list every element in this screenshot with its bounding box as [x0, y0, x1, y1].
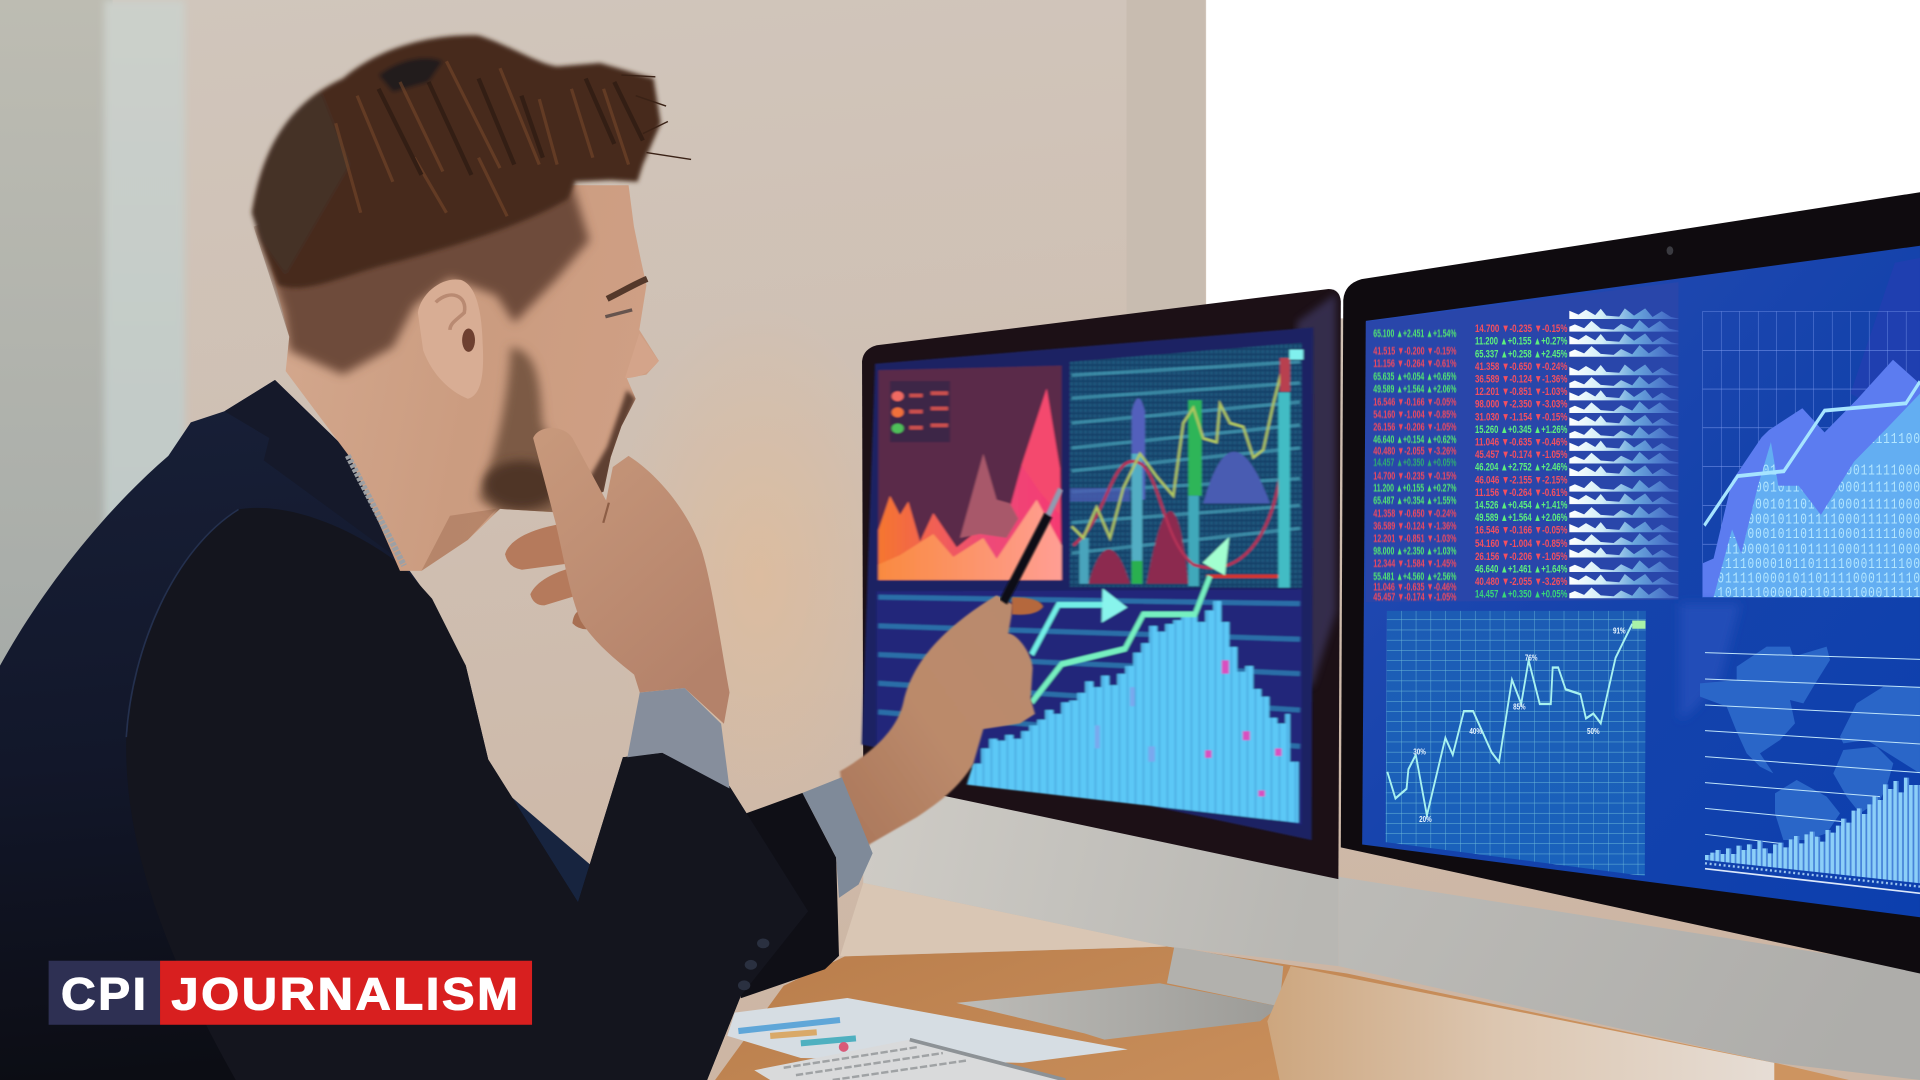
sparkline column — [1569, 308, 1678, 598]
binary digits in chart: 1111000010110111100011111000 — [1710, 526, 1920, 543]
nose shade — [628, 366, 654, 378]
binary digits in chart: 1111000010110111100011111000 — [1710, 496, 1920, 513]
near shirt cuff — [627, 688, 730, 788]
head and neck — [252, 35, 691, 571]
data table column one: 26.156 ▼-0.206 ▼-1.05% — [1373, 421, 1457, 434]
hand on chin — [505, 428, 730, 724]
arrow: cyan trend — [1032, 588, 1127, 655]
paper and keyboard on desk — [727, 998, 1128, 1080]
data table column one: 36.589 ▼-0.124 ▼-1.36% — [1373, 520, 1457, 533]
hair spikes — [621, 75, 691, 159]
ear — [418, 279, 483, 399]
data table column one: 98.000 ▲+2.350 ▲+1.03% — [1373, 546, 1457, 558]
data table column two: 26.156 ▼-0.206 ▼-1.05% — [1475, 551, 1568, 563]
data table column one: 41.358 ▼-0.650 ▼-0.24% — [1373, 508, 1457, 520]
shirt collar — [348, 456, 404, 566]
logo: CPI Journalism — [49, 961, 532, 1025]
data table column two: 31.030 ▼-1.154 ▼-0.15% — [1475, 411, 1568, 424]
logo red block — [160, 961, 532, 1025]
bezel glare right — [1297, 294, 1336, 686]
data table column two: 11.200 ▲+0.155 ▲+0.27% — [1475, 336, 1568, 348]
data table column one: 14.457 ▲+0.350 ▲+0.05% — [1373, 457, 1457, 469]
sideburn and beard — [479, 347, 557, 516]
binary digits in chart: 1111000010110111100011111000 — [1710, 479, 1920, 496]
data table column one: 16.546 ▼-0.166 ▼-0.05% — [1373, 396, 1457, 409]
screen content left — [862, 327, 1313, 840]
screen content right — [1362, 246, 1920, 917]
desk — [715, 947, 1849, 1080]
data table column two: 45.457 ▼-0.174 ▼-1.05% — [1475, 449, 1568, 461]
skin of head and neck — [271, 185, 659, 571]
logo text CPI: CPI — [61, 969, 146, 1019]
data table column two: 98.000 ▼-2.350 ▼-3.03% — [1475, 399, 1568, 411]
pen — [1003, 489, 1061, 602]
far shirt cuff — [802, 777, 873, 898]
line chart bottom left: 30% — [1413, 746, 1426, 757]
data table column two: 11.046 ▼-0.635 ▼-0.46% — [1475, 437, 1568, 449]
line chart bottom left: 76% — [1525, 652, 1538, 663]
jacket body — [0, 380, 808, 1080]
eye and brow — [605, 279, 647, 317]
person: analyst — [0, 35, 1061, 1080]
data table column one: 40.480 ▼-2.055 ▼-3.26% — [1373, 446, 1457, 458]
monitor right — [1338, 192, 1920, 1080]
neck shadow — [421, 509, 496, 571]
panel: multi-line chart — [1070, 343, 1303, 588]
binary digits in chart: 1111000010110111100011111000 — [1710, 541, 1920, 558]
data table column one: 14.700 ▼-0.235 ▼-0.15% — [1373, 470, 1457, 483]
line chart bottom left: 91% — [1613, 626, 1626, 636]
data table column one: 65.487 ▲+0.354 ▲+1.55% — [1373, 495, 1457, 508]
logo navy block — [49, 961, 160, 1025]
area chart top right — [1702, 258, 1920, 602]
fade of hair — [254, 175, 589, 375]
data table column two — [1475, 323, 1568, 601]
near sleeve — [126, 508, 808, 1080]
data table column two: 14.457 ▲+0.350 ▲+0.05% — [1475, 589, 1568, 601]
binary digits in chart: 1101111000010110111100011111 — [1710, 585, 1920, 602]
pointing hand — [840, 489, 1061, 867]
data table column two: 46.046 ▼-2.155 ▼-2.15% — [1475, 474, 1568, 487]
data table column one: 11.156 ▼-0.264 ▼-0.61% — [1373, 358, 1457, 370]
panel: red area chart — [878, 366, 1062, 580]
data table column two: 36.589 ▼-0.124 ▼-1.36% — [1475, 374, 1568, 386]
data table column one: 11.200 ▲+0.155 ▲+0.27% — [1373, 483, 1457, 495]
data table column one: 54.160 ▼-1.004 ▼-0.85% — [1373, 409, 1457, 421]
data table column two: 65.337 ▲+0.258 ▲+2.45% — [1475, 348, 1568, 361]
data table column two: 12.201 ▼-0.851 ▼-1.03% — [1475, 386, 1568, 398]
binary digits in chart — [1710, 431, 1920, 602]
panel: bar chart with arrows — [877, 537, 1302, 825]
binary digits in chart: 1011110000101101111000111110 — [1710, 570, 1920, 587]
data table column two: 15.260 ▲+0.345 ▲+1.26% — [1475, 424, 1568, 436]
data table column one: 46.640 ▲+0.154 ▲+0.62% — [1373, 434, 1457, 446]
line chart bottom left — [1385, 611, 1646, 876]
data table column two: 14.526 ▲+0.454 ▲+1.41% — [1475, 500, 1568, 512]
data table column two: 46.204 ▲+2.752 ▲+2.46% — [1475, 462, 1568, 474]
data table column one: 41.515 ▼-0.200 ▼-0.15% — [1373, 345, 1457, 358]
hair streaks — [336, 61, 643, 216]
data table column two: 16.546 ▼-0.166 ▼-0.05% — [1475, 525, 1568, 537]
binary digits in chart: 1111000010110111100011111100 — [1710, 431, 1920, 448]
world map and bars bottom right — [1680, 603, 1920, 893]
chin beard — [590, 388, 636, 492]
data table column two: 46.640 ▲+1.461 ▲+1.64% — [1475, 564, 1568, 576]
line chart bottom left: 40% — [1469, 726, 1482, 736]
hair — [252, 35, 661, 288]
data table column one: 55.481 ▲+4.560 ▲+2.56% — [1373, 571, 1457, 583]
webcam right — [1667, 246, 1673, 255]
data table column one: 11.046 ▼-0.635 ▼-0.46% — [1373, 581, 1457, 594]
binary digits in chart: 0111100001011011110001111100 — [1710, 556, 1920, 573]
data table column two: 41.358 ▼-0.650 ▼-0.24% — [1475, 361, 1568, 373]
line chart bottom left: 50% — [1587, 726, 1600, 736]
fade and beard clipped to head — [254, 175, 636, 516]
data table column one — [1373, 328, 1457, 604]
data table column two: 49.589 ▲+1.564 ▲+2.06% — [1475, 512, 1568, 525]
jacket and arm — [0, 380, 873, 1080]
binary digits in chart: 1111000010110111100011111000 — [1710, 511, 1920, 528]
line chart bottom left: 85% — [1513, 702, 1526, 712]
far arm strip — [512, 798, 590, 902]
data table column one: 12.344 ▼-1.584 ▼-1.45% — [1373, 558, 1457, 571]
data table column two: 54.160 ▼-1.004 ▼-0.85% — [1475, 538, 1568, 550]
data table column two: 40.480 ▼-2.055 ▼-3.26% — [1475, 576, 1568, 589]
data table column one: 65.100 ▲+2.451 ▲+1.54% — [1373, 328, 1457, 340]
cuff buttons — [738, 938, 769, 990]
data table column two: 11.156 ▼-0.264 ▼-0.61% — [1475, 487, 1568, 499]
data table column one: 45.457 ▼-0.174 ▼-1.05% — [1373, 592, 1457, 604]
data table column one: 49.589 ▲+1.564 ▲+2.06% — [1373, 384, 1457, 396]
data table column one: 65.635 ▲+0.054 ▲+0.65% — [1373, 371, 1457, 383]
monitor stand and left monitor — [840, 289, 1774, 1080]
arrow: green trend — [1032, 537, 1229, 702]
binary digits in chart: 1111000010110111100011111000 — [1710, 462, 1920, 479]
far sleeve — [741, 793, 839, 998]
data table column one: 12.201 ▼-0.851 ▼-1.03% — [1373, 533, 1457, 545]
logo text JOURNALISM: JOURNALISM — [171, 968, 518, 1019]
data table column two: 14.700 ▼-0.235 ▼-0.15% — [1475, 323, 1568, 335]
lapel — [224, 380, 372, 529]
line chart bottom left: 20% — [1419, 814, 1432, 824]
